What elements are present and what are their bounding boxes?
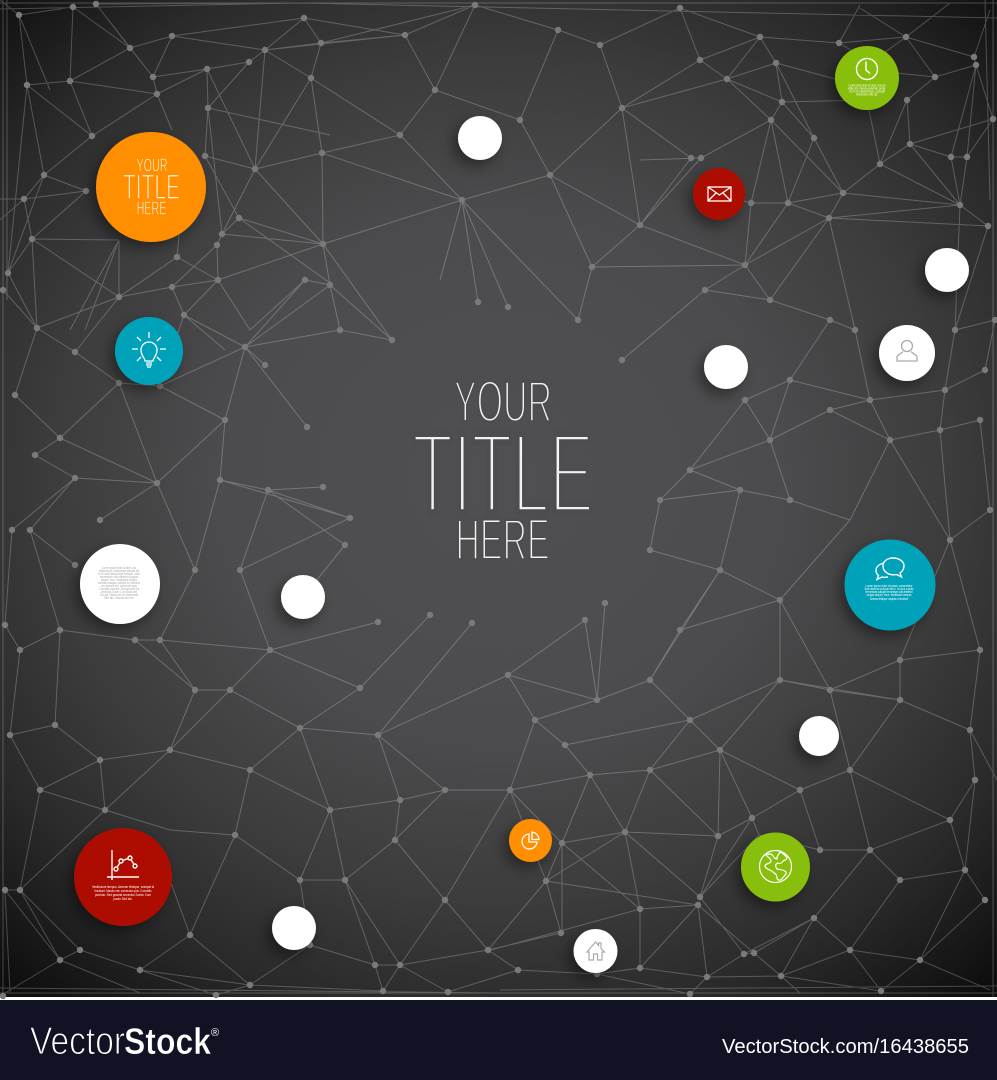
icon: speech bubbles <box>876 558 904 580</box>
chat text block: fermentum suscipit fermentum odio eleifend <box>866 590 913 594</box>
chat text block: Aenean tristique volutpat ut tincidunt <box>870 597 908 601</box>
lorem text block: senectus, Donec Cum paulo sed <box>101 590 137 594</box>
chart text block: Vestibulum tempus. Aenean tristique, volutpat id <box>92 885 154 889</box>
chart text block: pulvinar. Sed gravida senectus Donec Cum <box>95 893 151 897</box>
white dot right <box>925 248 969 292</box>
clock text block: fermentum odio dui. <box>856 92 878 96</box>
white dot lower right <box>799 716 839 756</box>
icon: light bulb <box>132 332 166 367</box>
icon: pie chart <box>522 832 539 849</box>
panel: white text circle <box>80 544 160 624</box>
white dot left center <box>281 575 325 619</box>
icon: globe <box>760 850 792 882</box>
chat text block: Lorem ipsum dolor sit amet, consectetur <box>866 584 913 588</box>
white dot top center <box>458 116 502 160</box>
footer: VectorStock logo: Stock <box>124 1021 211 1062</box>
lorem text block: non Mauris nec commodo quis <box>101 584 137 588</box>
icon: line chart <box>107 850 139 880</box>
panel: orange pie circle <box>509 819 552 862</box>
lorem text block: Sed dui. Mauris est non malesuada <box>100 593 138 597</box>
chat text block <box>864 584 914 601</box>
chat text block: congue aliquet, risus. Vestibulum tempus <box>866 593 912 597</box>
lorem text block: in mi urna ullamcorper suscipit, dolor <box>98 572 141 576</box>
center title: TITLE <box>412 409 594 537</box>
panel: teal bulb circle <box>115 317 183 385</box>
footer: image id: VectorStock.com/16438655 <box>722 1036 969 1058</box>
center title <box>412 370 594 573</box>
chat text block: Sed interdum pulvinar elit in. Ut urna a pede <box>864 587 914 591</box>
lorem text block: aliquet, risus. Vestibulum tempus <box>101 578 137 582</box>
lorem text block: fermentum odio eleifend congue <box>100 575 138 579</box>
clock text block: vitae leo massa pulvinar porta. <box>848 86 886 90</box>
lorem text block <box>98 566 141 600</box>
lorem text block: adipiscing et. Ullamcorper pulvinar elit <box>99 569 139 573</box>
panel: red chart circle <box>74 828 172 926</box>
panel: green clock circle <box>835 46 899 110</box>
footer: VectorStock logo: ® <box>211 1027 219 1039</box>
footer: VectorStock logo: Vector <box>30 1020 125 1063</box>
icon: person <box>897 340 917 361</box>
icon: house <box>587 942 604 960</box>
panel: orange title circle <box>96 132 206 242</box>
footer: VectorStock logo <box>30 1020 219 1063</box>
panel: white home circle <box>574 929 618 973</box>
clock text block <box>848 84 886 96</box>
panel: teal chat circle <box>844 540 936 630</box>
center title: HERE <box>455 508 550 573</box>
panel: white person circle <box>879 325 935 381</box>
white dot bottom left <box>272 906 316 950</box>
lorem text block: Aenean tristique volutpat id, tincidunt <box>98 581 140 585</box>
panel: orange title circle: YOUR <box>137 156 168 176</box>
lorem text block: Convallis pulvinar. Sed gravida dui <box>99 587 139 591</box>
chart text block <box>92 885 154 901</box>
panel: green globe circle <box>741 832 810 902</box>
icon: envelope <box>708 187 731 201</box>
panel: red mail circle <box>693 168 745 220</box>
lorem text block: Lorem ipsum dolor sit amet, cos <box>102 566 136 570</box>
clock text block: Ut in mi ullamcorper, suscipit <box>849 90 885 94</box>
chart text block: paulo Sed dui. <box>114 897 132 901</box>
center title: YOUR <box>454 370 552 435</box>
clock text block: Lorem ipsum dolor sit amet, cras est <box>848 84 886 88</box>
chart text block: tincidunt. Mauris nec commodo quis. Convallis <box>94 889 152 893</box>
lorem text block: Sed dui. Mauris est nec <box>104 596 134 600</box>
white dot center right <box>704 345 748 389</box>
icon: clock <box>856 58 878 80</box>
panel: orange title circle: HERE <box>137 199 166 219</box>
panel: orange title circle: TITLE <box>123 169 180 207</box>
